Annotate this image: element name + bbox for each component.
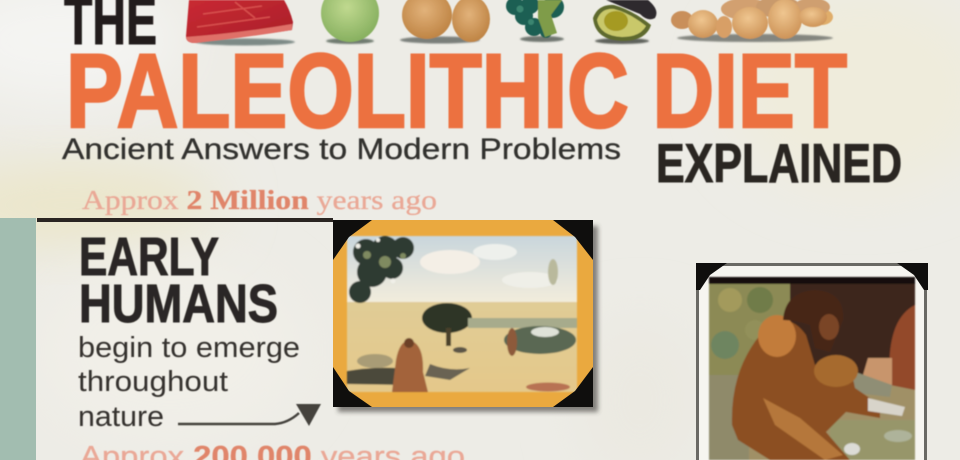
body text xyxy=(78,332,300,433)
food row xyxy=(186,0,833,46)
food: red meat xyxy=(186,0,295,46)
heading: early humans xyxy=(79,227,278,334)
timeline label: 2 million years ago: Approx 2 Million years ago xyxy=(82,185,437,215)
food: broccoli xyxy=(506,0,564,42)
photo: caveman xyxy=(696,263,928,460)
heading: early humans: EARLY xyxy=(79,227,219,287)
subtitle: Ancient Answers to Modern Problems xyxy=(62,133,621,166)
food: eggs xyxy=(400,0,490,44)
teal timeline bar xyxy=(0,218,36,460)
landscape painting xyxy=(347,236,577,392)
caveman painting xyxy=(709,277,915,460)
section panel: early humans xyxy=(37,218,333,433)
body text: throughout xyxy=(78,366,228,398)
photo: early humans landscape xyxy=(333,220,598,412)
photo corners xyxy=(333,220,593,407)
body text: begin to emerge xyxy=(78,332,300,364)
food: green apple xyxy=(321,0,379,44)
heading: early humans: HUMANS xyxy=(79,274,278,334)
arrow xyxy=(178,404,321,426)
photo corners xyxy=(696,263,928,290)
food: avocado xyxy=(593,0,656,44)
body text: nature xyxy=(78,401,164,433)
panel top rule xyxy=(37,218,333,222)
food: potatoes xyxy=(671,0,833,42)
